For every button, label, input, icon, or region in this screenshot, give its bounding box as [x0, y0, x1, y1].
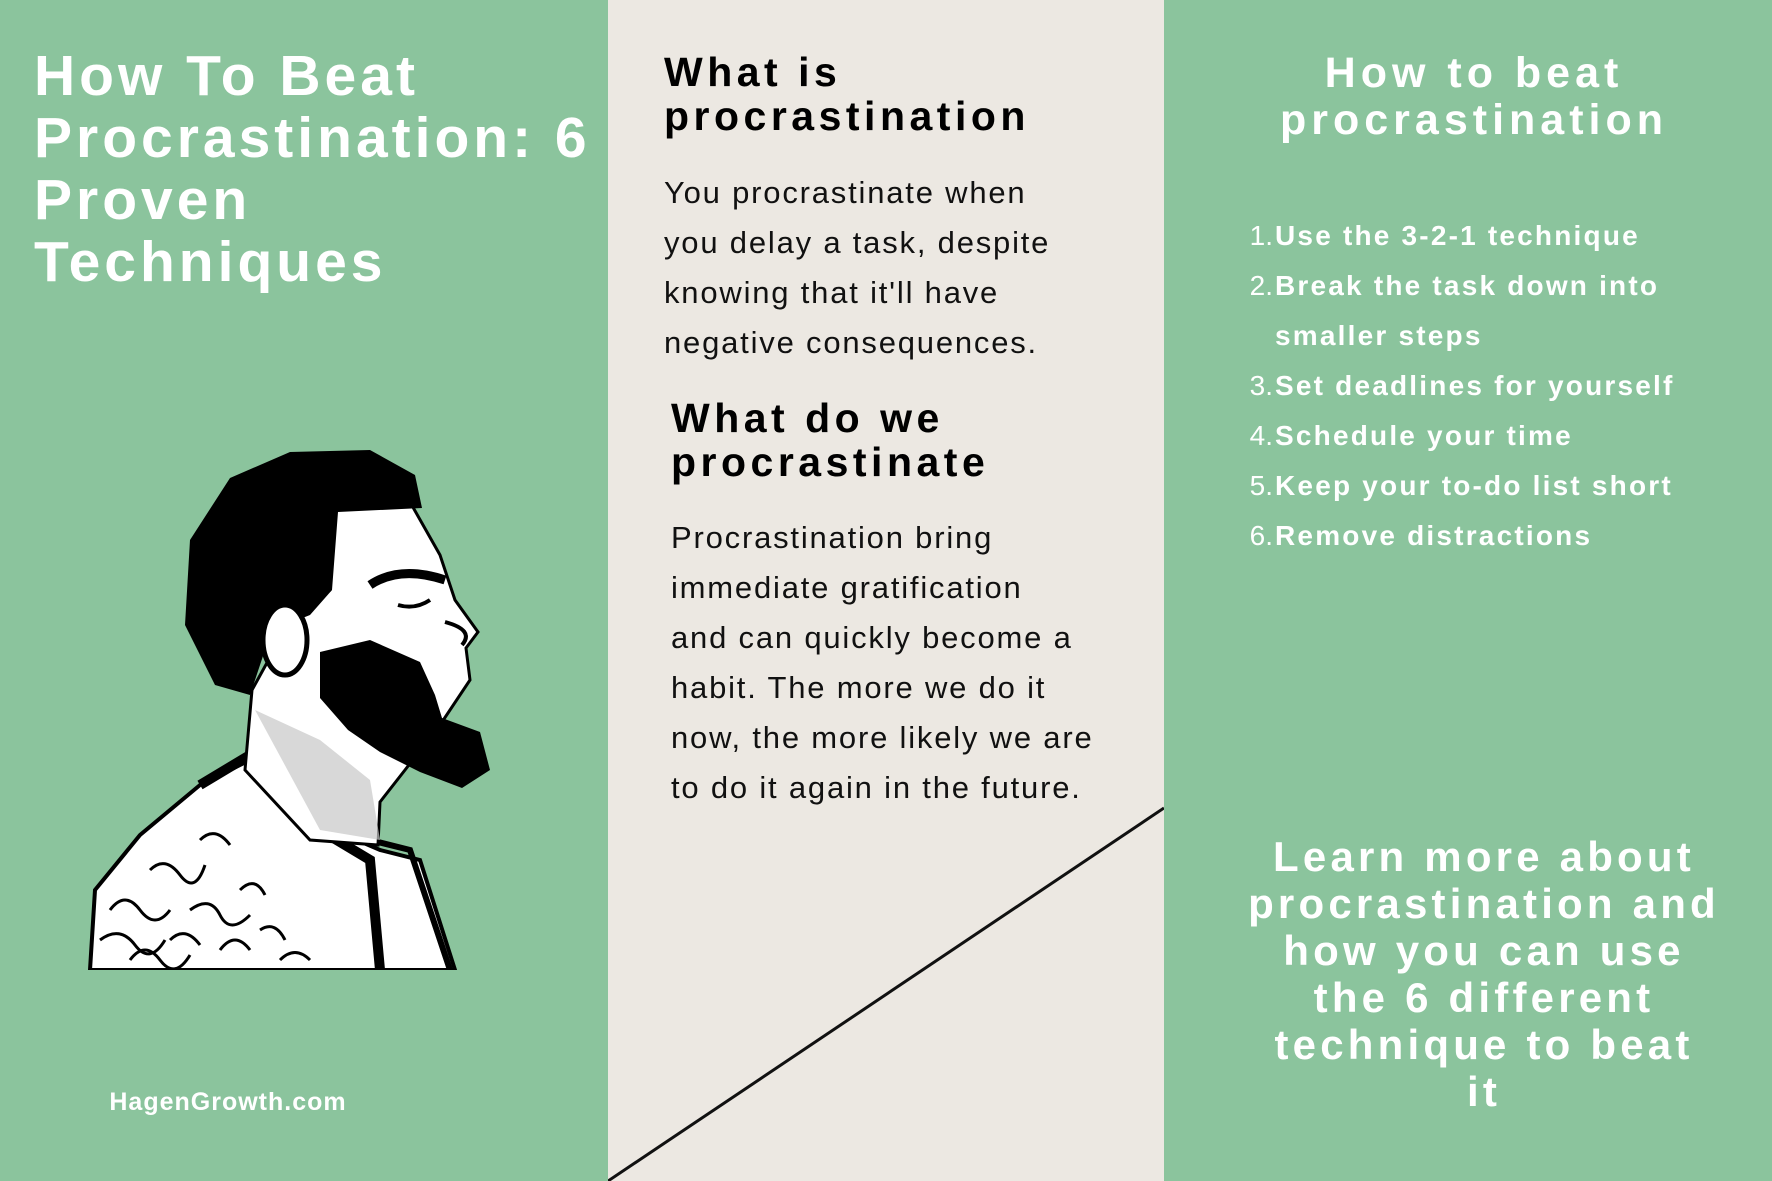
list: techniques: 5.: [1250, 470, 1273, 501]
list: techniques: Keep your to-do list short: [1275, 470, 1673, 501]
footer: website: HagenGrowth.com: [109, 1088, 347, 1116]
title: Techniques: [34, 230, 386, 294]
heading: what is procrastination: [664, 49, 1030, 139]
callout: learn more: it: [1467, 1068, 1501, 1115]
text block: reasons: immediate gratification: [671, 570, 1023, 605]
list: techniques: Schedule your time: [1275, 420, 1573, 451]
list: techniques: Use the 3-2-1 technique: [1275, 220, 1640, 251]
list: techniques: 2.: [1250, 270, 1273, 301]
callout: learn more: the 6 different: [1314, 974, 1654, 1021]
list: techniques: smaller steps: [1275, 320, 1483, 351]
heading: why do we procrastinate: [671, 395, 989, 485]
text block: reasons: now, the more likely we are: [671, 720, 1094, 755]
callout: learn more: [1248, 833, 1720, 1115]
text block: definition: knowing that it'll have: [664, 275, 999, 310]
callout: learn more: technique to beat: [1274, 1021, 1694, 1068]
panel: left: [0, 0, 608, 1181]
callout: learn more: procrastination and: [1248, 880, 1720, 927]
text block: reasons: Procrastination bring: [671, 520, 993, 555]
illustration: man in profile: [88, 450, 490, 970]
text block: definition: you delay a task, despite: [664, 225, 1050, 260]
heading: what is procrastination: procrastination: [664, 93, 1030, 139]
callout: learn more: how you can use: [1283, 927, 1685, 974]
text block: definition: [664, 175, 1050, 360]
list: techniques: Remove distractions: [1275, 520, 1592, 551]
heading: what is procrastination: What is: [664, 49, 841, 95]
list: techniques: Set deadlines for yourself: [1275, 370, 1675, 401]
title: Proven: [34, 168, 251, 232]
text block: reasons: [671, 520, 1094, 805]
heading: how to beat: How to beat: [1325, 49, 1623, 97]
list: techniques: [1250, 220, 1675, 551]
list: techniques: 4.: [1250, 420, 1273, 451]
text block: definition: negative consequences.: [664, 325, 1038, 360]
list: techniques: 1.: [1250, 220, 1273, 251]
text block: reasons: and can quickly become a: [671, 620, 1073, 655]
text block: definition: You procrastinate when: [664, 175, 1026, 210]
title: Procrastination: 6: [34, 106, 591, 170]
heading: how to beat: [1280, 49, 1668, 144]
panel: middle: [608, 0, 1164, 1181]
text block: reasons: to do it again in the future.: [671, 770, 1082, 805]
title: [34, 44, 591, 294]
list: techniques: Break the task down into: [1275, 270, 1659, 301]
callout: learn more: Learn more about: [1273, 833, 1695, 880]
text block: reasons: habit. The more we do it: [671, 670, 1046, 705]
list: techniques: 3.: [1250, 370, 1273, 401]
heading: why do we procrastinate: procrastinate: [671, 439, 989, 485]
heading: how to beat: procrastination: [1280, 96, 1668, 144]
diagonal line: [608, 806, 1164, 1181]
title: How To Beat: [34, 44, 419, 108]
list: techniques: 6.: [1250, 520, 1273, 551]
panel: right: [1164, 0, 1772, 1181]
heading: why do we procrastinate: What do we: [671, 395, 944, 441]
